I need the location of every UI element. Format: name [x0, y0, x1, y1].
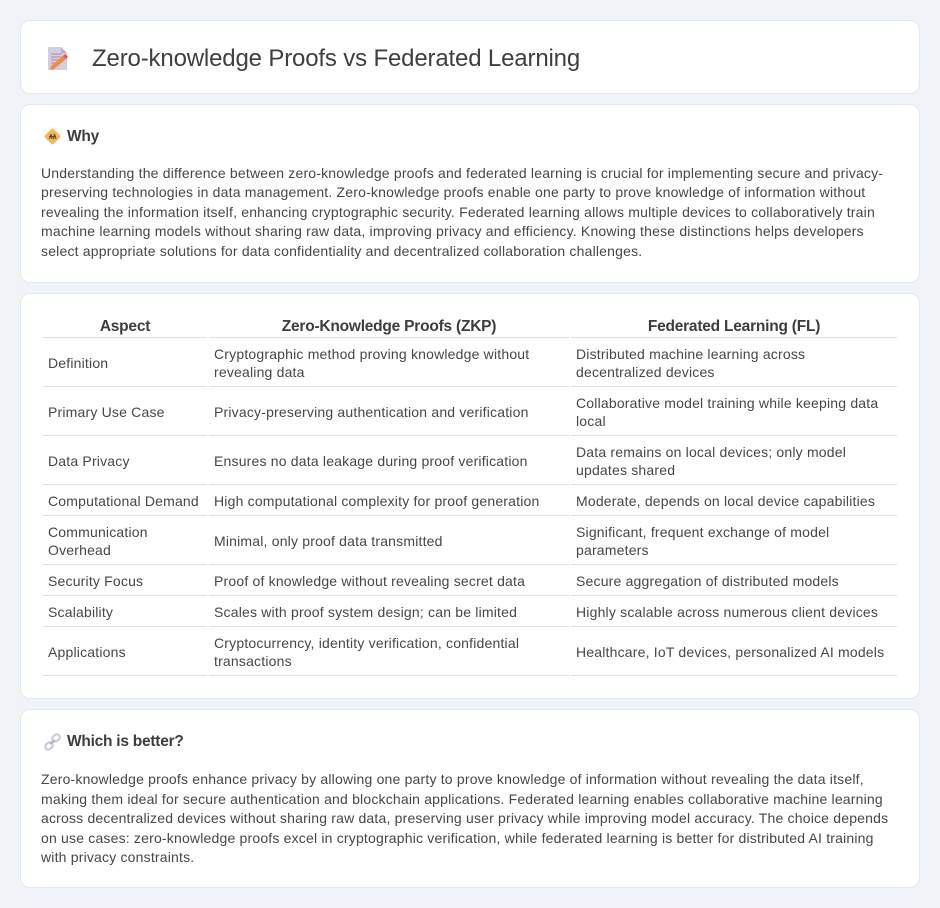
text: Secure aggregation of distributed models	[576, 573, 839, 589]
text: Definition	[48, 355, 108, 371]
text: Healthcare, IoT devices, personalized AI models	[576, 644, 884, 660]
table header: zkp: Zero-Knowledge Proofs (ZKP)	[282, 318, 496, 335]
row: definition	[48, 346, 805, 380]
text: Computational Demand	[48, 493, 199, 509]
text: Privacy-preserving authentication and verification	[214, 404, 529, 420]
row: computational demand	[48, 493, 875, 509]
panel: why	[20, 104, 920, 283]
text: Highly scalable across numerous client devices	[576, 604, 878, 620]
text: decentralized devices	[576, 364, 715, 380]
text: local	[576, 413, 606, 429]
title: Zero-knowledge Proofs vs Federated Learning	[92, 45, 580, 72]
text: revealing data	[214, 364, 305, 380]
text: Applications	[48, 644, 126, 660]
text: Primary Use Case	[48, 404, 165, 420]
text: Scalability	[48, 604, 113, 620]
panel: which is better	[20, 709, 920, 888]
text block: which is better: with privacy constraints.	[41, 849, 194, 865]
text block: why	[41, 165, 883, 259]
row: data privacy	[48, 444, 846, 478]
row: communication overhead	[48, 524, 829, 558]
table header: aspect: Aspect	[100, 318, 150, 335]
text block: why: select appropriate solutions for data confidentiality and decentralized collaboration challenges.	[41, 243, 642, 259]
text: updates shared	[576, 462, 675, 478]
icon: document with pencil	[48, 47, 68, 70]
text: Cryptographic method proving knowledge without	[214, 346, 529, 362]
panel: comparison table	[20, 293, 920, 699]
text: Data Privacy	[48, 453, 130, 469]
row: applications	[48, 635, 884, 669]
text: Collaborative model training while keeping data	[576, 395, 878, 411]
text: Minimal, only proof data transmitted	[214, 533, 443, 549]
text: Significant, frequent exchange of model	[576, 524, 829, 540]
text block: why: Understanding the difference between zero-knowledge proofs and federated learning is crucial for implementing secure and privacy-	[41, 165, 883, 181]
text block: which is better	[41, 771, 888, 865]
text block: why: machine learning models without sharing raw data, improving privacy and efficiency. Knowing these distinctions helps developers	[41, 223, 864, 239]
icon: warning diamond	[44, 128, 60, 144]
text block: why: preserving technologies in data management. Zero-knowledge proofs enable one party to prove knowledge of information without	[41, 184, 865, 200]
text block: which is better: Zero-knowledge proofs enhance privacy by allowing one party to prove knowledge of information without revealing the data itself,	[41, 771, 864, 787]
heading: why: Why	[67, 128, 99, 145]
text: Scales with proof system design; can be limited	[214, 604, 517, 620]
text: parameters	[576, 542, 649, 558]
text: Moderate, depends on local device capabilities	[576, 493, 875, 509]
row: scalability	[48, 604, 878, 620]
text block: which is better: on use cases: zero-knowledge proofs excel in cryptographic verification, while federated learning is better for distributed AI training	[41, 830, 874, 846]
icon: link	[44, 733, 61, 751]
table header: fl: Federated Learning (FL)	[648, 318, 820, 335]
row: primary use case	[48, 395, 878, 429]
text: Security Focus	[48, 573, 143, 589]
text block: which is better: making them ideal for secure authentication and blockchain applications. Federated learning enables collaborative machine learning	[41, 791, 883, 807]
row: security focus	[48, 573, 839, 589]
text block: which is better: across decentralized devices without sharing raw data, preserving user privacy while improving model accuracy. The choice depends	[41, 810, 888, 826]
text: Ensures no data leakage during proof verification	[214, 453, 528, 469]
text: Distributed machine learning across	[576, 346, 805, 362]
heading: which is better: Which is better?	[67, 733, 184, 750]
header card	[20, 20, 920, 94]
table rules	[43, 337, 897, 676]
text: Overhead	[48, 542, 111, 558]
text: transactions	[214, 653, 292, 669]
text: Data remains on local devices; only model	[576, 444, 846, 460]
text: Cryptocurrency, identity verification, confidential	[214, 635, 519, 651]
text block: why: revealing the information itself, enhancing cryptographic security. Federated learning allows multiple devices to collaboratively train	[41, 204, 875, 220]
text: High computational complexity for proof generation	[214, 493, 539, 509]
text: Communication	[48, 524, 148, 540]
text: Proof of knowledge without revealing secret data	[214, 573, 525, 589]
